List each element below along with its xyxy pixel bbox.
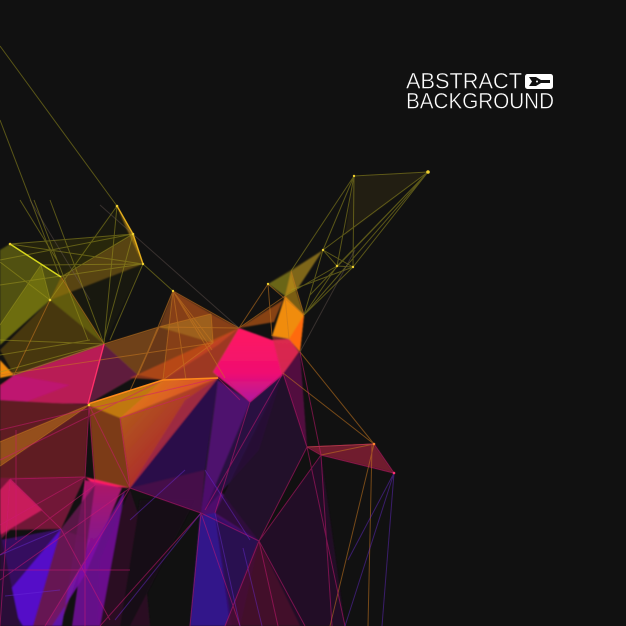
polygon mesh: thin lines bbox=[0, 46, 428, 626]
mesh nodes bbox=[9, 170, 430, 474]
icon: pen nib badge bbox=[525, 74, 553, 89]
polygon mesh: filled facets bbox=[0, 172, 428, 626]
title: abstract background bbox=[406, 68, 554, 114]
title line one: ABSTRACT bbox=[406, 68, 522, 94]
title line two: BACKGROUND bbox=[406, 88, 554, 114]
